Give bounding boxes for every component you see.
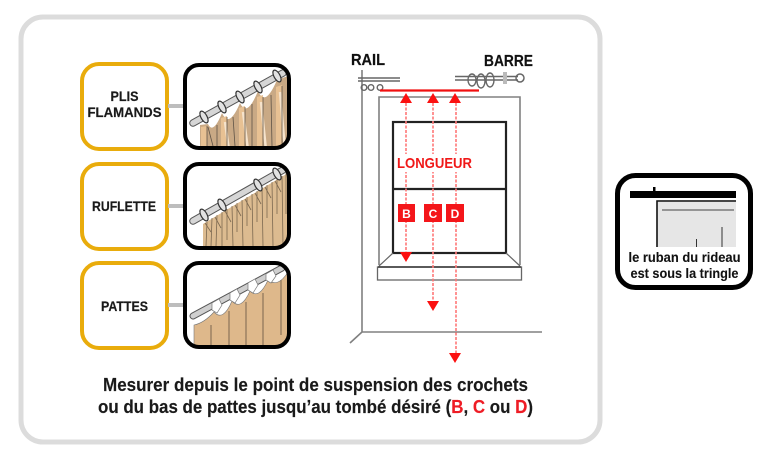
- label: pattes: [82, 263, 167, 348]
- caption: ou du bas de pattes jusqu’au tombé désiré (B, C ou D): [98, 397, 533, 417]
- measure tags B C D: [398, 204, 464, 222]
- curtain tape: [657, 200, 736, 247]
- measure arrows: [400, 93, 461, 363]
- longueur label: LONGUEUR: [397, 155, 472, 172]
- rings: [198, 167, 283, 222]
- label: rail: RAIL: [351, 52, 385, 69]
- image: ruflette curtain: [185, 164, 289, 250]
- card text: [628, 250, 740, 281]
- card text: est sous la tringle: [630, 266, 739, 281]
- label: ruflette: RUFLETTE: [92, 198, 156, 214]
- main panel: [21, 17, 600, 442]
- measure tags B C D: B: [402, 207, 411, 221]
- label: ruflette: [82, 164, 167, 249]
- label: pattes: PATTES: [101, 298, 148, 314]
- rod: [193, 170, 283, 221]
- window sill: [378, 267, 522, 280]
- measure tags B C D: D: [451, 207, 460, 221]
- image: pattes curtain: [185, 263, 289, 350]
- barre hardware: [455, 72, 524, 88]
- caption: [98, 375, 533, 417]
- connector: ruflette: [168, 204, 184, 208]
- side card: ruban sous la tringle: [618, 176, 750, 288]
- rail hardware: [358, 78, 400, 90]
- measure tags B C D: C: [429, 207, 438, 221]
- label: barre: BARRE: [484, 53, 533, 70]
- red top line: [380, 89, 479, 92]
- diagram: window measurement: [350, 52, 542, 363]
- wall and floor: [350, 70, 542, 343]
- rod: [193, 268, 282, 316]
- rod: [193, 73, 283, 123]
- connector: pattes: [168, 303, 184, 307]
- image: plis flamands curtain: [185, 65, 289, 150]
- label: plis flamands: [82, 64, 167, 149]
- tabs: [212, 270, 276, 313]
- connector: plis flamands: [168, 104, 184, 108]
- label: plis flamands: PLIS: [110, 88, 138, 104]
- tringle bar: [630, 187, 736, 198]
- card text: le ruban du rideau: [628, 250, 740, 265]
- window outer frame: [379, 97, 520, 265]
- rings: [198, 69, 283, 124]
- window panes: [379, 122, 520, 266]
- caption: Mesurer depuis le point de suspension des crochets: [103, 375, 528, 395]
- label: plis flamands: FLAMANDS: [88, 104, 162, 120]
